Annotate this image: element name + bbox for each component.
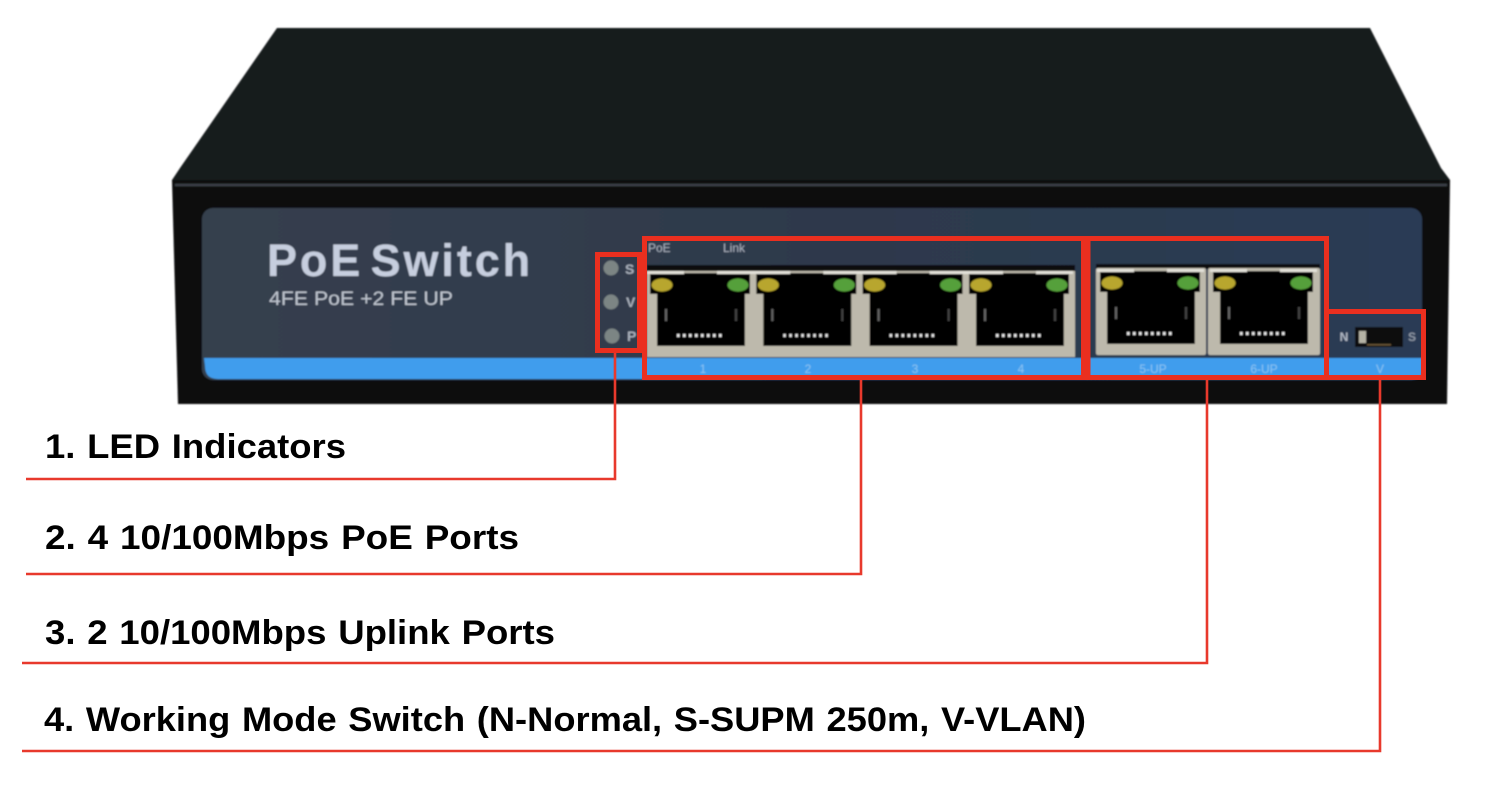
box: uplink ports [1088, 238, 1326, 378]
port numbers: 1 [700, 362, 707, 376]
product name: PoE Switch [267, 235, 533, 286]
uplink ports 5-6 [1096, 264, 1320, 355]
label 2: 2. 4 10/100Mbps PoE Ports [45, 519, 519, 557]
switch device [172, 28, 1450, 404]
uplink labels [1139, 362, 1278, 376]
leader line 1 [26, 353, 615, 479]
label 1: 1. LED Indicators [45, 428, 346, 466]
LED indicators: V [626, 294, 636, 310]
product subtitle: 4FE PoE +2 FE UP [269, 289, 453, 310]
LED indicators [604, 260, 636, 344]
leader line 3 [22, 380, 1207, 663]
LED indicators: P [627, 328, 636, 344]
uplink labels: 6-UP [1250, 362, 1278, 376]
working mode switch [1340, 327, 1416, 376]
callout labels [44, 428, 1086, 739]
working mode switch: N [1340, 330, 1348, 344]
port numbers: 4 [1018, 362, 1025, 376]
device front face [172, 180, 1450, 404]
port numbers: 2 [805, 362, 812, 376]
leader line 2 [26, 380, 861, 574]
box: PoE ports [644, 238, 1084, 378]
port numbers [700, 362, 1025, 376]
blue status strip [204, 358, 1422, 379]
label 4: 4. Working Mode Switch (N-Normal, S-SUPM 250m, V-VLAN) [44, 701, 1086, 739]
PoE ports 1-4 [647, 265, 1075, 357]
port numbers: 3 [912, 362, 919, 376]
PoE and Link labels [648, 241, 746, 255]
uplink labels: 5-UP [1139, 362, 1167, 376]
box: LED indicators [598, 254, 640, 350]
PoE and Link labels: PoE [648, 241, 671, 255]
leader line 4 [22, 380, 1380, 751]
LED indicators: S [625, 261, 634, 277]
device top face [172, 28, 1450, 180]
label 3: 3. 2 10/100Mbps Uplink Ports [45, 614, 555, 652]
working mode switch: V [1376, 362, 1384, 376]
PoE and Link labels: Link [723, 241, 746, 255]
working mode switch: S [1408, 330, 1416, 344]
box: mode switch [1326, 312, 1424, 378]
red highlight boxes [598, 238, 1424, 378]
front label panel [202, 208, 1422, 380]
